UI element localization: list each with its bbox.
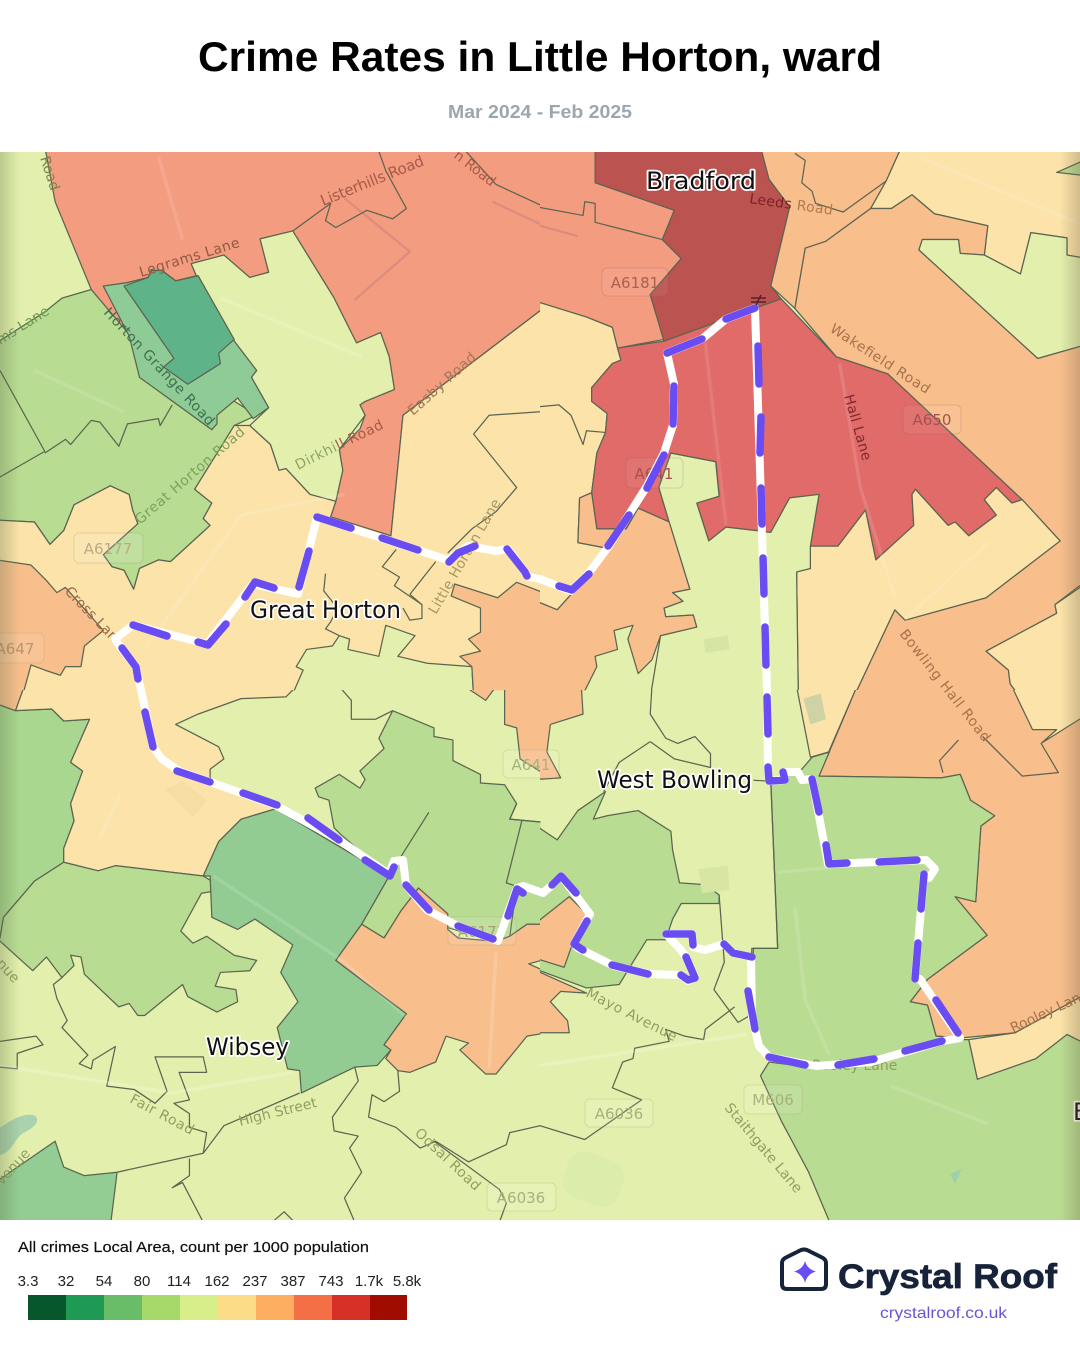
- road labels: Odsal Road: [411, 1125, 484, 1194]
- road number shields: A6036: [595, 1105, 643, 1123]
- legend scale labels: 114: [167, 1273, 191, 1290]
- road number shields: A650: [913, 411, 951, 429]
- road labels: Hall Lane: [840, 393, 874, 462]
- road labels: Little Horton Lane: [426, 496, 504, 617]
- road labels: Horton Grange Road: [100, 305, 217, 429]
- map edge shading: [0, 152, 1080, 1220]
- legend scale labels: 80: [134, 1273, 150, 1290]
- road labels: Road: [36, 154, 62, 193]
- road labels: Legrams Lane: [137, 235, 242, 281]
- road number shields: A641: [512, 756, 550, 774]
- map quadrant: south west: [0, 687, 548, 1227]
- legend scale labels: 162: [204, 1273, 230, 1290]
- legend scale labels: 54: [96, 1273, 112, 1290]
- legend scale labels: [18, 1273, 422, 1290]
- road labels: [0, 148, 1080, 1196]
- road labels: Listerhills Road: [318, 152, 426, 210]
- website url: crystalroof.co.uk: [880, 1305, 1008, 1322]
- road number shields: A641: [635, 465, 673, 483]
- ward boundary: dashed route: [115, 308, 960, 1066]
- place labels: Wibsey: [206, 1033, 289, 1061]
- road labels: n Road: [451, 148, 499, 190]
- place labels: West Bowling: [597, 766, 752, 794]
- road labels: Wakefield Road: [827, 321, 933, 398]
- logo wordmark: Crystal Roof: [838, 1258, 1058, 1296]
- legend scale labels: 3.3: [18, 1273, 38, 1290]
- road number shields: A6181: [611, 274, 659, 292]
- subtitle: date range: Mar 2024 - Feb 2025: [448, 102, 632, 122]
- icon: house with sparkle: [782, 1250, 826, 1289]
- road labels: Bowling Hall Road: [896, 627, 993, 745]
- legend scale labels: 387: [280, 1273, 306, 1290]
- legend scale labels: 743: [318, 1273, 344, 1290]
- road number shields: [0, 268, 961, 1211]
- title: Crime Rates in Little Horton, ward: [198, 33, 882, 80]
- legend scale labels: 237: [242, 1273, 268, 1290]
- map quadrant: north east: [537, 147, 1080, 698]
- legend scale labels: 1.7k: [355, 1273, 384, 1290]
- road labels: Great Horton Road: [132, 424, 248, 528]
- icon: railway station: [751, 295, 766, 305]
- road labels: Easby Road: [405, 350, 480, 419]
- road labels: Staithgate Lane: [721, 1100, 805, 1196]
- legend scale labels: 5.8k: [393, 1273, 422, 1290]
- legend: [18, 1239, 422, 1320]
- logo: Crystal Roof: [782, 1250, 1058, 1322]
- road labels: Dirkhill Road: [293, 417, 386, 474]
- road labels: Fair Road: [127, 1091, 196, 1138]
- road number shields: A6036: [497, 1189, 545, 1207]
- road number shields: A6177: [84, 540, 132, 558]
- road labels: High Street: [237, 1095, 319, 1130]
- road labels: Cross Lan: [61, 584, 121, 645]
- legend scale labels: 32: [58, 1273, 74, 1290]
- legend colour bar: [28, 1295, 407, 1320]
- place labels: Great Horton: [250, 596, 401, 624]
- road labels: Leeds Road: [748, 191, 834, 219]
- road number shields: A6177: [458, 923, 506, 941]
- legend title: All crimes Local Area, count per 1000 population: [18, 1239, 369, 1256]
- road labels: Mayo Avenue: [583, 985, 680, 1045]
- place labels: Bradford: [646, 167, 756, 195]
- road number shields: M606: [752, 1091, 794, 1109]
- map quadrant: south east: [537, 687, 1080, 1238]
- map quadrant: north west: [0, 147, 548, 698]
- road labels: Rooley Lane: [812, 1058, 897, 1074]
- place labels: [206, 167, 1080, 1126]
